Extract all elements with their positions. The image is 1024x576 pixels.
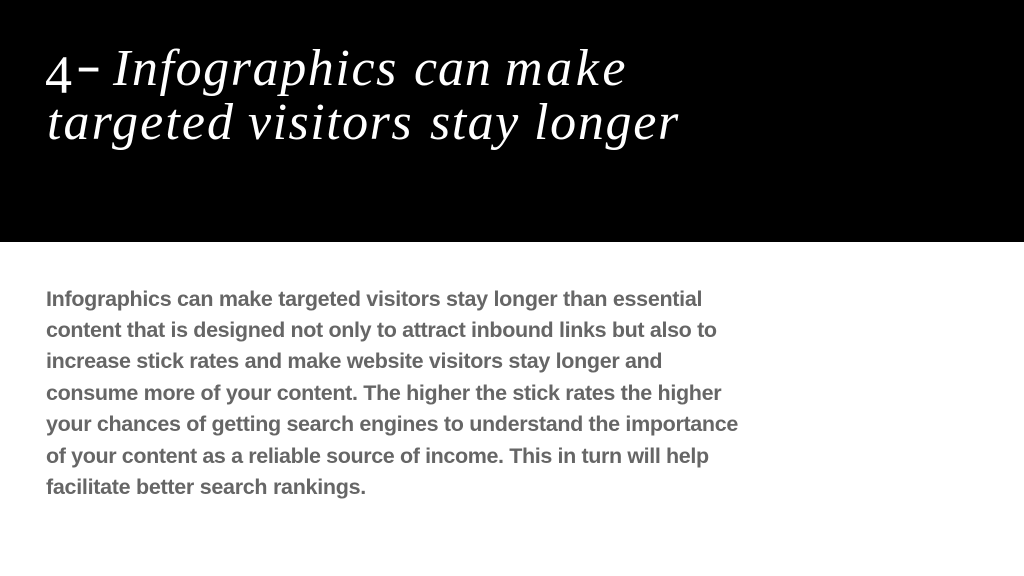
body text: content that is designed not only to attract inbound links but also to — [46, 318, 717, 342]
title: targeted — [47, 94, 235, 151]
body text — [46, 286, 738, 499]
header panel — [0, 0, 1024, 242]
title: make — [505, 40, 629, 97]
body text: consume more of your content. The higher the stick rates the higher — [46, 381, 721, 405]
title: stay — [430, 94, 520, 151]
body text: Infographics can make targeted visitors stay longer than essential — [46, 286, 702, 310]
title: visitors — [248, 94, 413, 151]
title: 4 — [45, 45, 72, 105]
body text: increase stick rates and make website visitors stay longer and — [46, 349, 662, 373]
body text: facilitate better search rankings. — [46, 475, 366, 499]
title: Infographics — [113, 40, 398, 97]
title — [45, 37, 680, 151]
title: - — [76, 37, 101, 94]
body text: your chances of getting search engines to understand the importance — [46, 412, 738, 436]
body text: of your content as a reliable source of income. This in turn will help — [46, 444, 709, 468]
title: can — [414, 40, 492, 97]
title: longer — [534, 94, 680, 151]
